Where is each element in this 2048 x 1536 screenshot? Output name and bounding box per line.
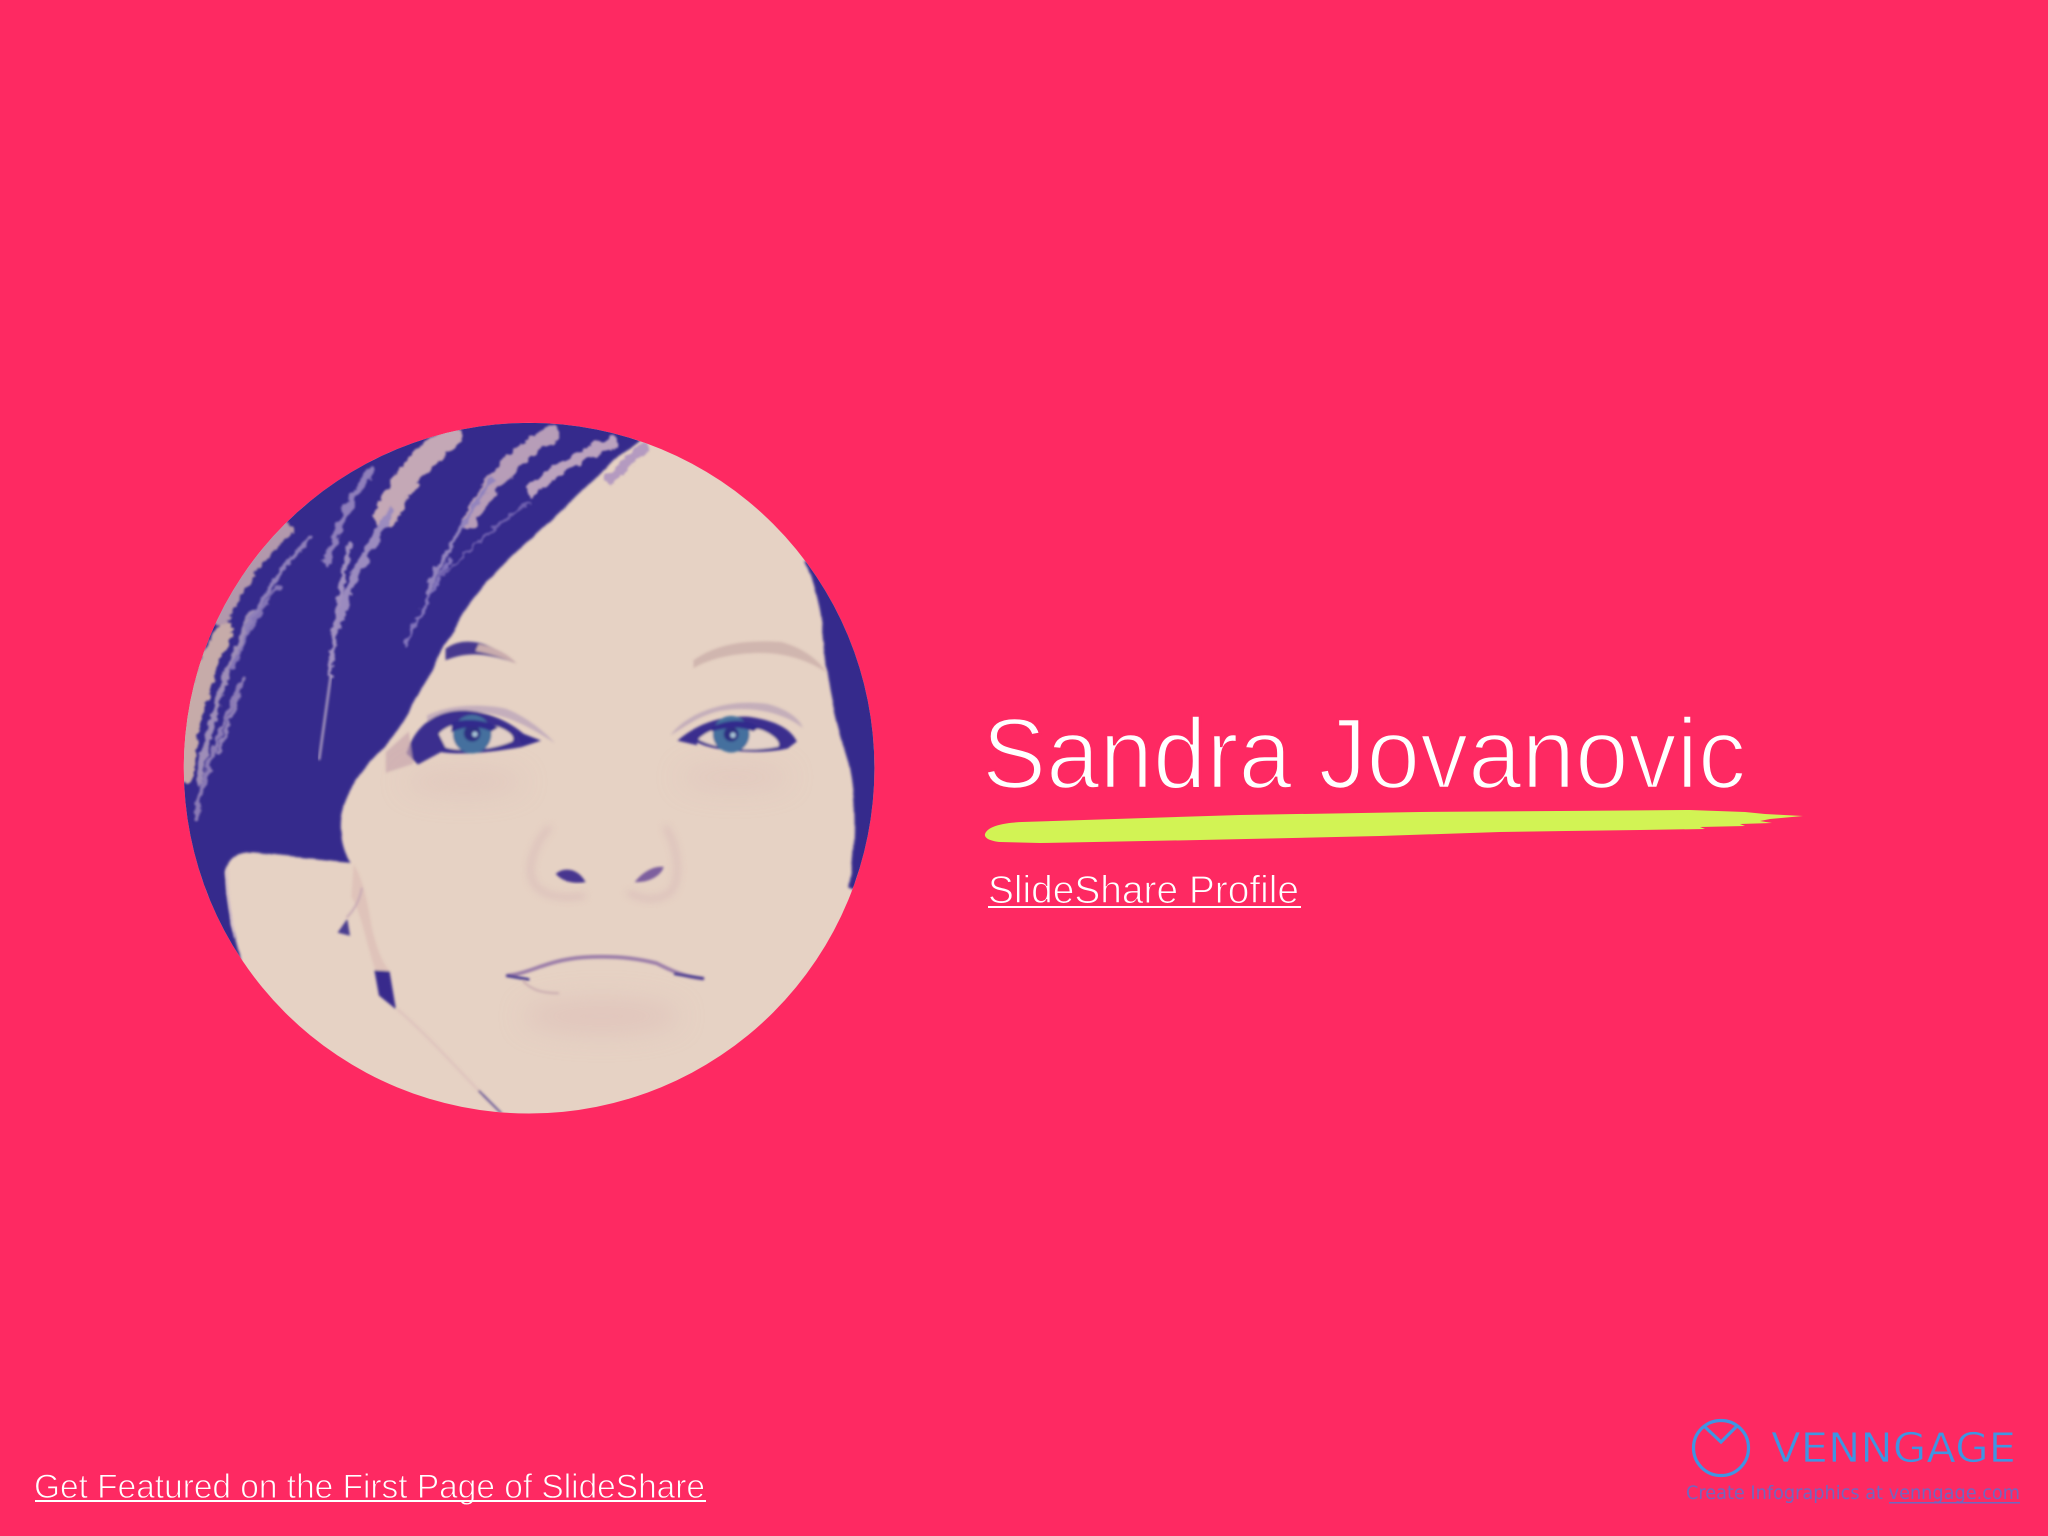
hand creases — [227, 865, 502, 1113]
venngage tagline: Create Infographics at venngage.com — [1686, 1482, 2020, 1504]
name heading: Sandra Jovanovic — [982, 698, 1746, 810]
mouth — [508, 957, 703, 993]
eyebrows — [446, 641, 827, 673]
hair streaks — [184, 433, 643, 819]
venngage wordmark: VENNGAGE — [1771, 1424, 2016, 1472]
portrait photo — [170, 410, 890, 1130]
link: slideshare profile: SlideShare Profile — [988, 869, 1299, 912]
brush underline — [985, 810, 1803, 843]
link: get featured: Get Featured on the First Page of SlideShare — [34, 1468, 705, 1506]
venngage logo — [1694, 1420, 2016, 1476]
right eye — [671, 703, 803, 753]
hair — [170, 410, 890, 961]
icon: venngage mark — [1694, 1420, 1748, 1476]
left eye — [386, 706, 555, 773]
nose — [531, 828, 677, 899]
